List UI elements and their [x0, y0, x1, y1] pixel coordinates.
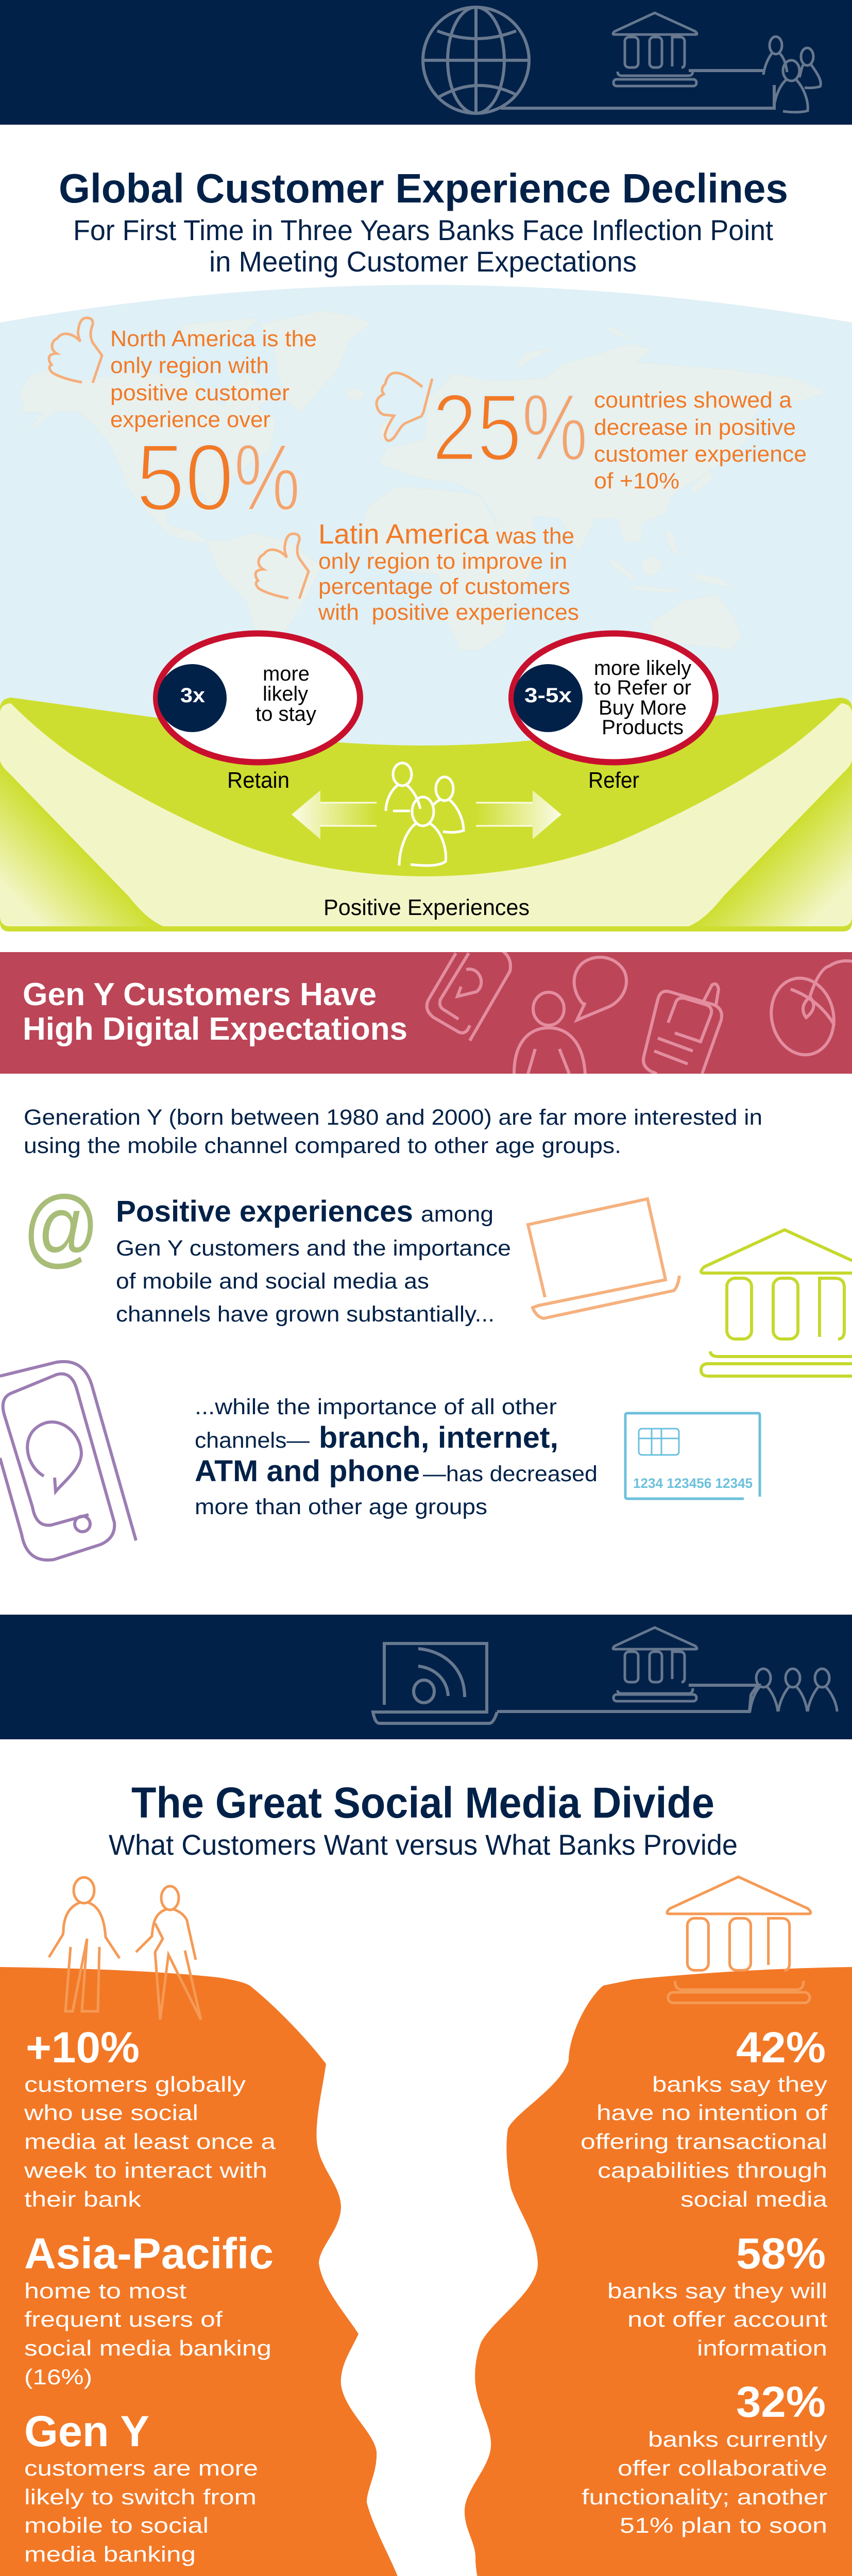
icon: bank [613, 13, 697, 86]
title: Global Customer Experience Declines [59, 165, 788, 211]
icon: purple phone [0, 1362, 136, 1560]
callout: Latin America: was the [496, 523, 574, 549]
icon: walkie talkie [643, 984, 722, 1074]
stat: +10%: who use social [24, 2100, 198, 2125]
stat: +10%: media at least once a [24, 2129, 276, 2154]
text: more likely to stay: more [263, 663, 310, 685]
badge: 3-5x [514, 664, 583, 732]
section band with laptop, bank and people icons [0, 1615, 852, 1739]
badge: 3-5x: 3-5x [524, 684, 572, 707]
stat: +10% [24, 2023, 276, 2211]
stat: 32%: 32% [736, 2378, 826, 2426]
text: more likely to refer [594, 657, 691, 739]
text: positive experiences: of mobile and social media as [116, 1269, 429, 1294]
callout: 25 percent of countries: countries showed a [594, 387, 792, 413]
callout: North America: positive customer [110, 380, 289, 405]
text: positive experiences: among [421, 1202, 493, 1227]
callout: North America: North America is the [110, 326, 317, 351]
stat: Asia-Pacific: social media banking [24, 2336, 271, 2360]
subtitle: in Meeting Customer Expectations [209, 245, 637, 278]
text: other channels decreased: branch, internet, [319, 1421, 558, 1454]
stat: 42%: social media [680, 2187, 828, 2211]
stat: Asia-Pacific: (16%) [24, 2365, 92, 2389]
icon: two customers [49, 1877, 201, 2020]
callout: 25 percent of countries: 25 [432, 374, 522, 480]
icon: thumbs up [49, 318, 102, 383]
icon: thumbs down [377, 373, 432, 441]
heading: The Great Social Media Divide: The Great Social Media Divide [131, 1778, 714, 1827]
stat: 58%: banks say they will [607, 2279, 827, 2303]
retain ellipse [156, 634, 360, 762]
stat: +10%: customers globally [24, 2072, 246, 2096]
stat: 42%: banks say they [652, 2072, 827, 2096]
icon: bank card: 1234 123456 12345 [633, 1476, 753, 1491]
callout: North America: experience over [110, 407, 270, 432]
icon: smartphone [427, 951, 510, 1041]
stat: 42%: capabilities through [598, 2158, 827, 2182]
icon: connecting lines [497, 1685, 758, 1711]
text: other channels decreased [195, 1395, 598, 1519]
stat: Gen Y: customers are more [24, 2456, 258, 2480]
stat: 58%: information [697, 2336, 827, 2360]
stat: Asia-Pacific: home to most [24, 2279, 186, 2303]
text: other channels decreased: ...while the importance of all other [195, 1395, 557, 1419]
callout: North America [49, 318, 317, 530]
icon: at sign: @ [23, 1178, 99, 1276]
refer ellipse [512, 634, 715, 762]
panel: positive experiences bowl [0, 698, 852, 931]
stat: Asia-Pacific [24, 2229, 274, 2389]
text: other channels decreased: —has decreased [423, 1462, 598, 1486]
callout: Latin America [255, 519, 579, 625]
text: more likely to refer: to Refer or [594, 676, 691, 699]
subtitle [73, 214, 773, 278]
callout: 25 percent of countries: of +10% [594, 468, 679, 494]
icon: laptop with RSS [373, 1643, 497, 1723]
callout: 25 percent of countries: customer experience [594, 442, 807, 467]
text: Generation Y intro [24, 1105, 762, 1158]
stat: 42%: 42% [736, 2023, 826, 2072]
stat: 32%: banks currently [648, 2427, 827, 2451]
badge: 3x: 3x [180, 684, 205, 707]
stat: 58%: not offer account [627, 2307, 827, 2331]
stat: 32% [582, 2378, 827, 2537]
banner heading: Gen Y Customers Have [23, 977, 377, 1012]
banner heading: High Digital Expectations [23, 1011, 407, 1047]
arrow: right [476, 790, 561, 839]
header band with globe, bank and people icons [0, 0, 852, 125]
banner icons [427, 951, 852, 1074]
text: positive experiences: channels have grown substantially... [116, 1302, 495, 1327]
banner: Gen Y [0, 951, 852, 1074]
text: more likely to refer: more likely [594, 657, 691, 680]
stat: +10%: week to interact with [24, 2158, 267, 2182]
stat: 42%: have no intention of [597, 2100, 827, 2125]
stat: Gen Y: likely to switch from [24, 2485, 257, 2509]
icon: people group [763, 37, 821, 112]
label: Positive Experiences: Positive Experiences [323, 895, 530, 920]
icon: bank green [701, 1230, 852, 1376]
text: positive experiences: Gen Y customers and the importance [116, 1236, 511, 1261]
callout: Latin America: percentage of customers [318, 574, 570, 599]
callout: Latin America: only region to improve in [318, 549, 567, 574]
icon: bank orange [667, 1877, 811, 2003]
callout: North America: % [234, 424, 300, 530]
callout: North America: only region with [110, 353, 269, 378]
icon: person [514, 992, 585, 1074]
callout: 25 percent of countries: % [522, 374, 588, 480]
stat: Gen Y: media banking [24, 2542, 196, 2566]
stat: Asia-Pacific: Asia-Pacific [24, 2229, 274, 2278]
banner heading [23, 977, 407, 1047]
callout: 25 percent of countries: decrease in positive [594, 415, 796, 440]
icon: mouse [764, 961, 852, 1061]
panel: customers cliff [0, 1877, 401, 2576]
badge: 3x [158, 664, 227, 732]
text: other channels decreased: more than other age groups [195, 1495, 487, 1519]
stat: 58%: 58% [736, 2229, 826, 2278]
stat: Asia-Pacific: frequent users of [24, 2307, 223, 2331]
stat: +10%: +10% [26, 2023, 140, 2072]
text: other channels decreased: channels— [195, 1428, 310, 1453]
panel: banks cliff [465, 1877, 852, 2576]
stat: 32%: functionality; another [582, 2485, 827, 2509]
icon: three people [750, 1669, 837, 1711]
callout: Latin America: Latin America [318, 519, 489, 550]
callout: North America: 50 [136, 424, 234, 530]
stat: Gen Y: Gen Y [24, 2407, 149, 2455]
text: more likely to refer: Products [602, 716, 684, 739]
callout: Latin America: with positive experiences [318, 600, 579, 625]
stat: 32%: offer collaborative [618, 2456, 827, 2480]
icon: connecting lines [501, 71, 774, 108]
stat: 42%: offering transactional [581, 2129, 827, 2154]
icon: bank card [625, 1413, 760, 1499]
icon: bank [613, 1628, 697, 1701]
text: more likely to stay: to stay [255, 703, 316, 725]
subtitle: For First Time in Three Years Banks Face Inflection Point [73, 214, 773, 246]
arrow: left [292, 790, 377, 839]
text: Generation Y intro: Generation Y (born between 1980 and 2000) are far more interested in [24, 1105, 762, 1130]
label: Refer: Refer [588, 768, 639, 793]
label: Retain: Retain [227, 768, 289, 793]
icon: thumbs up small [255, 534, 309, 599]
stat: Gen Y: mobile to social [24, 2513, 209, 2537]
callout: 25 percent of countries [377, 373, 807, 494]
text: more likely to stay [255, 663, 316, 725]
stat: 32%: 51% plan to soon [620, 2513, 827, 2537]
stat: 42% [581, 2023, 828, 2211]
stat: +10%: their bank [24, 2187, 142, 2211]
icon: speech bubble [574, 957, 626, 1020]
panel: world map background [0, 285, 852, 752]
text: positive experiences [116, 1195, 511, 1327]
stat: Gen Y [24, 2407, 258, 2566]
icon: globe [423, 7, 529, 113]
icon: laptop [528, 1199, 679, 1318]
text: more likely to refer: Buy More [599, 697, 687, 719]
text: other channels decreased: ATM and phone [195, 1454, 420, 1488]
text: Generation Y intro: using the mobile channel compared to other age groups. [24, 1133, 621, 1158]
subheading: What Customers Want versus What Banks Provide [109, 1828, 738, 1861]
icon: customers group [386, 763, 464, 866]
text: positive experiences: Positive experiences [116, 1195, 413, 1228]
text: more likely to stay: likely [263, 683, 308, 705]
stat: 58% [607, 2229, 827, 2360]
